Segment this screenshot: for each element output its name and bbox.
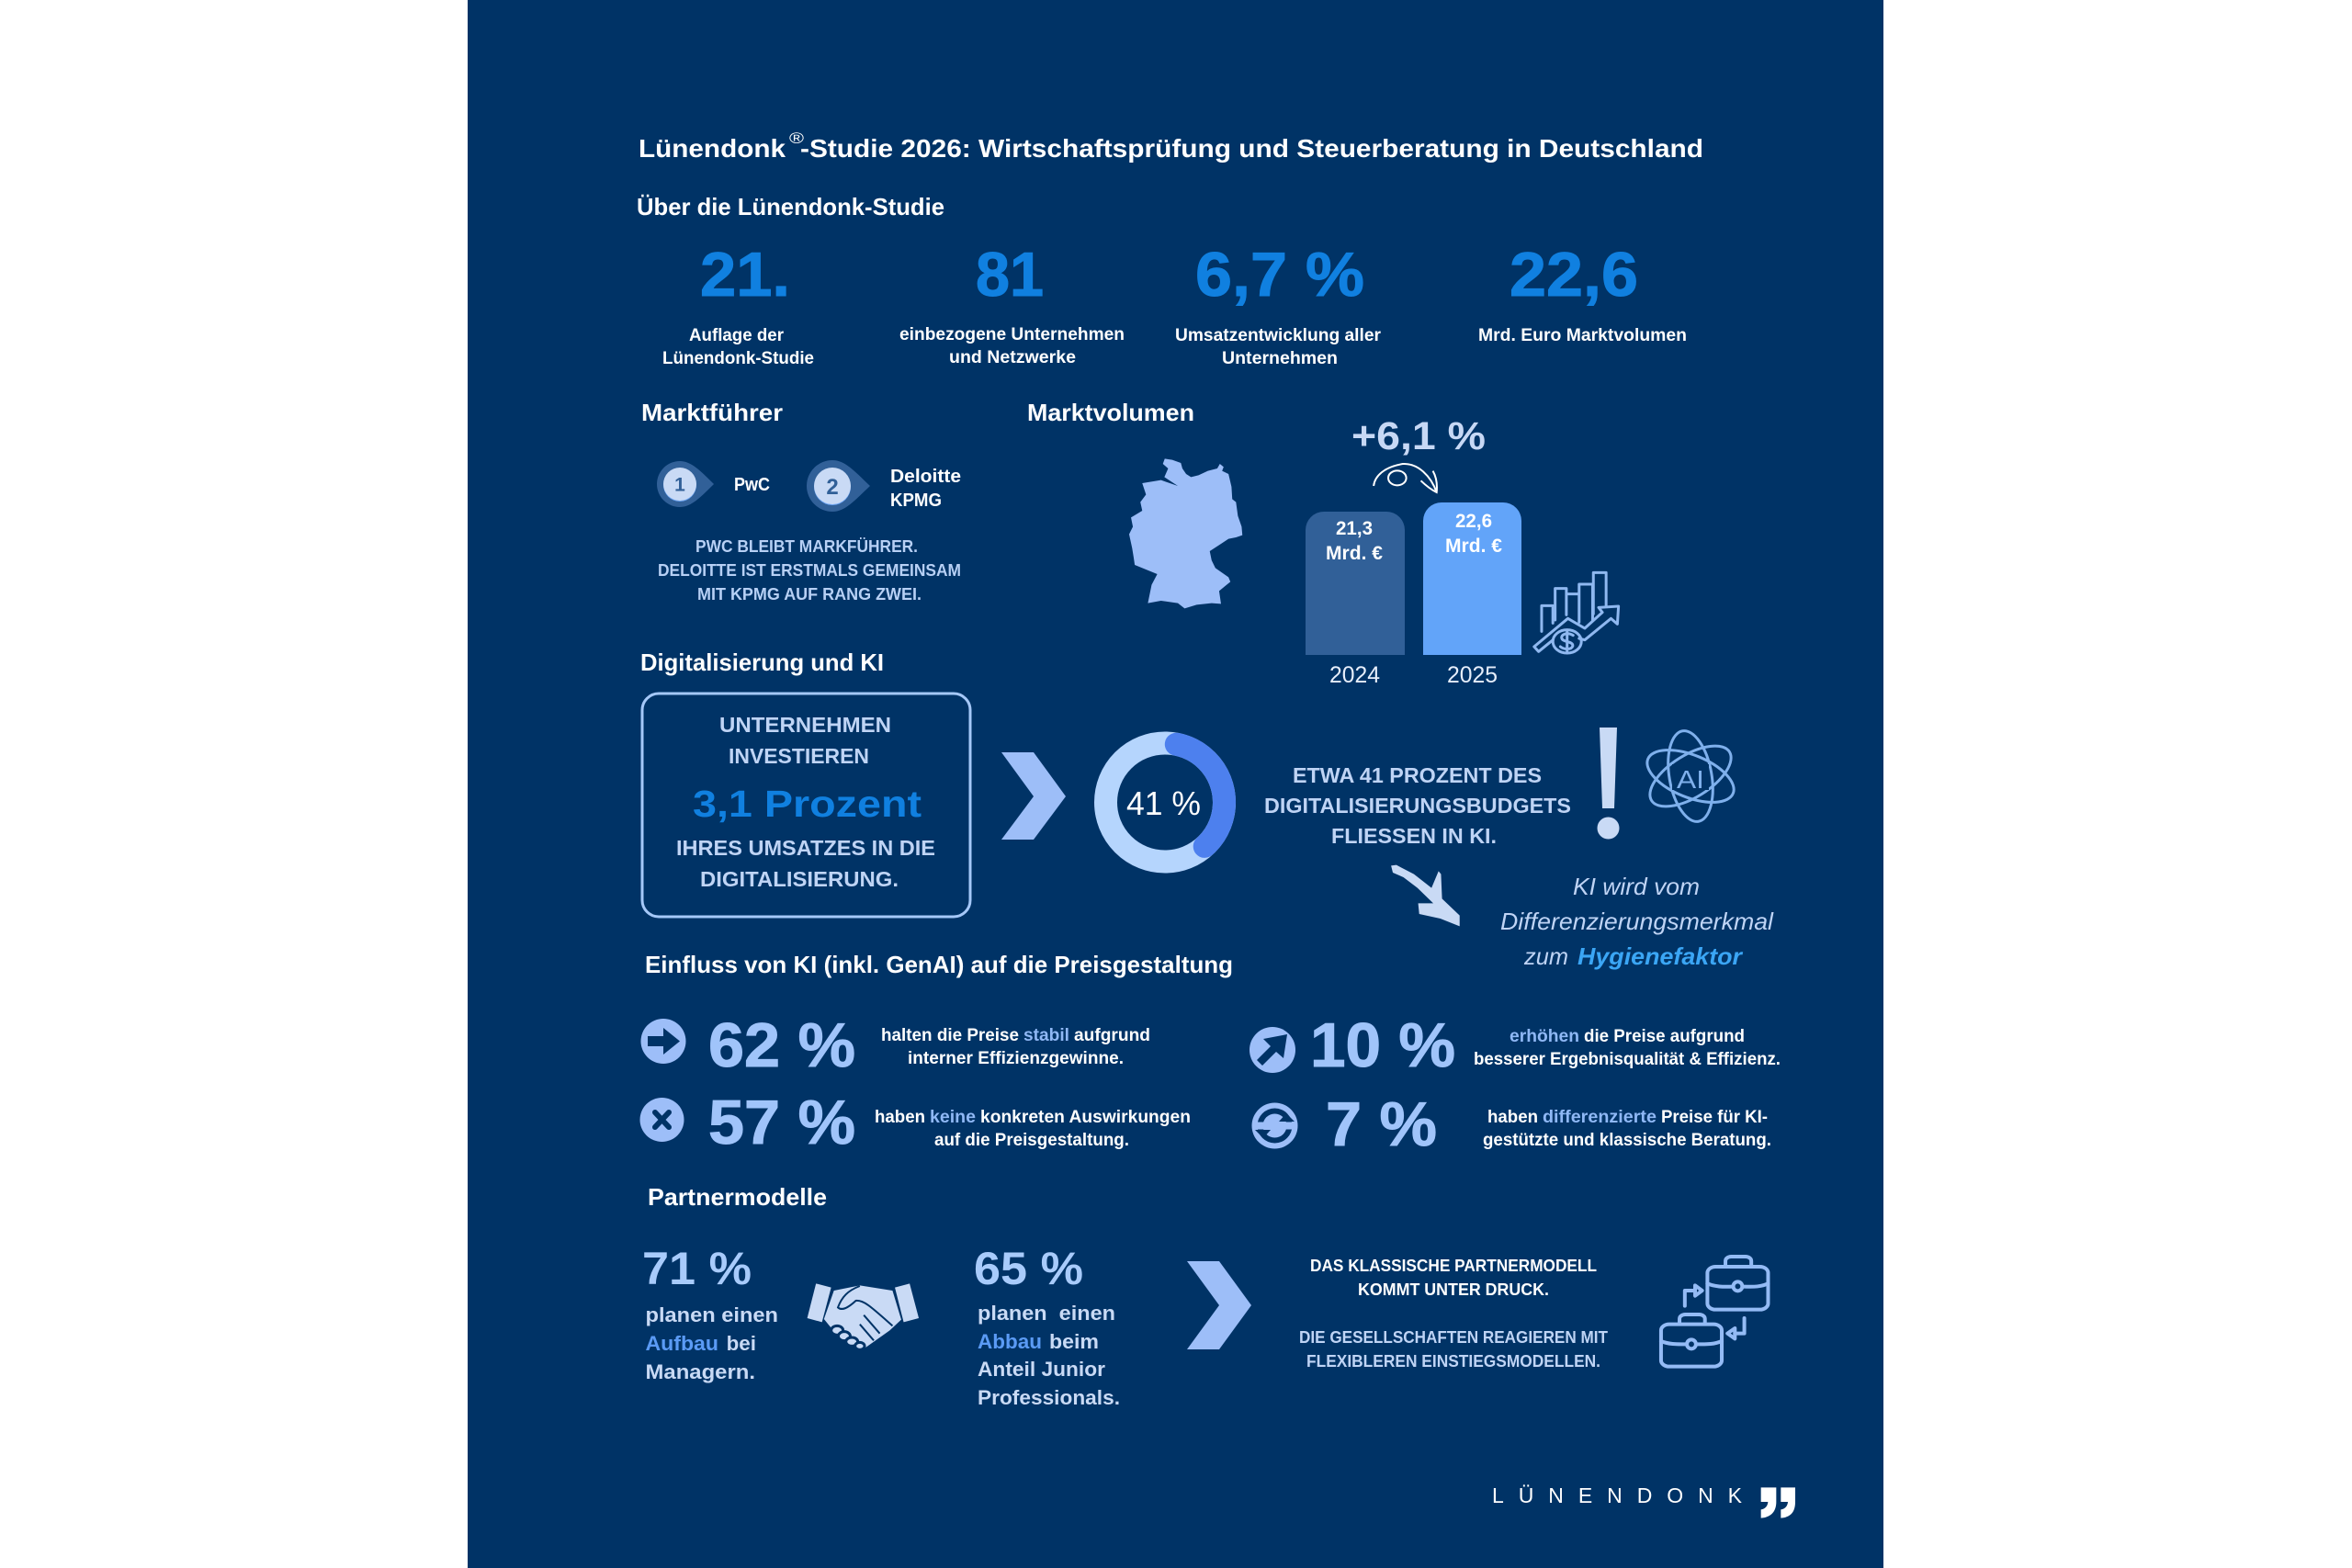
icon: arrow right circle — [641, 1019, 685, 1064]
stat: 7 percent: 7 % — [1326, 1089, 1437, 1159]
callout: investment box: INVESTIEREN — [729, 744, 869, 768]
bar: 2024 — [1306, 512, 1405, 688]
text: 10 percent description: erhöhen — [1510, 1027, 1579, 1046]
text: 65 percent description: beim — [1049, 1330, 1099, 1353]
heading: market volume: Marktvolumen — [1027, 399, 1194, 426]
text: 10 percent description: die Preise aufgrund — [1584, 1027, 1745, 1046]
stat: market volume: Mrd. Euro Marktvolumen — [1478, 326, 1687, 345]
bar: 2025 — [1423, 502, 1521, 688]
stat: edition — [662, 240, 814, 368]
stat: 62 percent: 62 % — [708, 1010, 855, 1080]
text: 57 percent description: keine — [930, 1108, 976, 1127]
stat: 10 percent: 10 % — [1310, 1010, 1455, 1080]
text: 71 percent description: Managern. — [645, 1360, 755, 1383]
stat: companies — [899, 240, 1125, 367]
text: 57 percent description: auf die Preisgestaltung. — [934, 1131, 1129, 1150]
background panel — [468, 0, 1883, 1568]
stat: 71 percent: 71 % — [642, 1243, 752, 1294]
icon: exclamation mark — [1597, 728, 1619, 840]
stat: revenue growth: 6,7 % — [1195, 240, 1364, 310]
stat: revenue growth: Umsatzentwicklung aller — [1175, 326, 1382, 345]
text: 71 percent description: bei — [727, 1332, 756, 1355]
icon: refresh circle — [1251, 1102, 1297, 1148]
arrow: pointing to statement — [1391, 865, 1460, 926]
stat: edition: Auflage der — [689, 326, 785, 345]
stat: revenue growth: Unternehmen — [1222, 349, 1338, 368]
title — [639, 130, 1703, 163]
text: 62 percent description — [881, 1026, 1150, 1068]
text: hygiene factor statement: Hygienefaktor — [1577, 942, 1744, 970]
stat: companies: und Netzwerke — [949, 348, 1076, 367]
callout: investment box — [642, 694, 970, 917]
text: AI share of budget — [1264, 763, 1571, 848]
text: 71 percent description — [645, 1303, 778, 1383]
text: leaders summary: MIT KPMG AUF RANG ZWEI. — [697, 585, 922, 604]
text: hygiene factor statement: KI wird vom — [1573, 873, 1700, 900]
text: hygiene factor statement — [1500, 873, 1774, 970]
text: 57 percent description: haben — [875, 1108, 925, 1127]
stat: revenue growth — [1175, 240, 1382, 368]
text: 10 percent description — [1474, 1027, 1781, 1069]
text: 62 percent description: aufgrund — [1074, 1026, 1150, 1045]
callout: investment box: IHRES UMSATZES IN DIE — [676, 836, 935, 860]
panel: market leaders — [641, 399, 961, 604]
text: 62 percent description: halten die Preise — [881, 1026, 1019, 1045]
title: -Studie 2026: Wirtschaftsprüfung und Steuerberatung in Deutschland — [800, 134, 1703, 163]
text: partner model conclusion: DAS KLASSISCHE PARTNERMODELL — [1310, 1257, 1597, 1275]
bar: 2024: 21,3 — [1336, 518, 1373, 539]
donut chart: 41 percent: 41 % — [1126, 784, 1201, 822]
callout: investment box: DIGITALISIERUNG. — [700, 867, 899, 891]
donut chart: 41 percent — [1106, 743, 1224, 862]
text: partner model conclusion — [1299, 1257, 1608, 1371]
bar: 2025: 2025 — [1447, 662, 1498, 688]
text: partner model conclusion: DIE GESELLSCHAFTEN REAGIEREN MIT — [1299, 1328, 1608, 1347]
arrow: chevron — [1187, 1261, 1251, 1349]
callout: investment box: UNTERNEHMEN — [719, 713, 891, 737]
stat: companies: einbezogene Unternehmen — [899, 325, 1125, 344]
icon: rank 2 badge — [807, 460, 870, 512]
stat: market volume — [1478, 240, 1687, 345]
stat: edition: 21. — [700, 240, 790, 310]
text: 7 percent description: gestützte und klassische Beratung. — [1483, 1131, 1771, 1150]
icon: handshake — [808, 1283, 919, 1349]
logo: Lünendonk — [1492, 1483, 1795, 1518]
text: hygiene factor statement: zum — [1523, 942, 1568, 970]
text: leaders summary: DELOITTE IST ERSTMALS GEMEINSAM — [658, 561, 961, 580]
heading: AI influence on pricing: Einfluss von KI (inkl. GenAI) auf die Preisgestaltung — [645, 951, 1233, 978]
stat: market volume: 22,6 — [1510, 240, 1638, 310]
text: 62 percent description: stabil — [1023, 1026, 1069, 1045]
text: partner model conclusion: KOMMT UNTER DRUCK. — [1358, 1280, 1549, 1299]
text: 65 percent description: Professionals. — [978, 1386, 1120, 1409]
label: Deloitte and KPMG: KPMG — [890, 491, 942, 511]
icon: arrow up-right circle — [1250, 1027, 1295, 1073]
bar: 2025: 22,6 — [1455, 511, 1492, 532]
label: Deloitte and KPMG — [890, 467, 961, 511]
text: leaders summary — [658, 537, 961, 604]
text: 57 percent description: konkreten Auswirkungen — [980, 1108, 1191, 1127]
text: leaders summary: PWC BLEIBT MARKFÜHRER. — [695, 537, 918, 556]
text: 7 percent description: differenzierte — [1543, 1108, 1657, 1127]
text: AI share of budget: DIGITALISIERUNGSBUDGETS — [1264, 794, 1571, 818]
panel: AI influence on pricing — [639, 951, 1781, 1159]
panel: market volume — [1027, 399, 1619, 688]
stat: edition: Lünendonk-Studie — [662, 349, 814, 368]
heading: about the study: Über die Lünendonk-Studie — [637, 193, 944, 220]
icon: cross circle — [639, 1098, 684, 1142]
stat: 57 percent: 57 % — [708, 1088, 855, 1157]
title: Lünendonk — [639, 134, 786, 163]
text: 7 percent description — [1483, 1108, 1771, 1150]
arrow: hand-drawn growth arrow — [1374, 464, 1437, 492]
icon: briefcases — [1661, 1257, 1768, 1367]
text: 65 percent description: Anteil Junior — [978, 1358, 1105, 1381]
text: partner model conclusion: FLEXIBLEREN EINSTIEGSMODELLEN. — [1306, 1352, 1600, 1371]
text: AI share of budget: FLIESSEN IN KI. — [1331, 824, 1497, 848]
icon: map of Germany — [1129, 458, 1242, 608]
text: 65 percent description: Abbau — [978, 1330, 1042, 1353]
text: 57 percent description — [875, 1108, 1191, 1150]
stat: companies: 81 — [976, 240, 1044, 310]
bar: 2024: Mrd. € — [1326, 543, 1383, 564]
callout: investment box: 3,1 Prozent — [693, 783, 922, 825]
bar: 2025: Mrd. € — [1445, 536, 1502, 557]
text: 7 percent description: haben — [1487, 1108, 1538, 1127]
text: 10 percent description: besserer Ergebnisqualität & Effizienz. — [1474, 1050, 1781, 1069]
text: 71 percent description: Aufbau — [645, 1332, 718, 1355]
heading: partner models: Partnermodelle — [648, 1183, 827, 1211]
title: ® — [789, 130, 805, 147]
arrow: chevron — [1001, 752, 1066, 840]
text: hygiene factor statement: Differenzierungsmerkmal — [1500, 908, 1774, 935]
heading: digitalisation and AI: Digitalisierung und KI — [640, 649, 884, 676]
text: 65 percent description: planen einen — [978, 1302, 1115, 1325]
stat: 65 percent: 65 % — [974, 1243, 1083, 1294]
growth figure: +6,1 % — [1351, 414, 1486, 458]
label: Deloitte and KPMG: Deloitte — [890, 467, 961, 487]
icon: chart with dollar — [1534, 572, 1619, 653]
icon: rank 1 badge: 1 — [674, 474, 685, 496]
text: AI share of budget: ETWA 41 PROZENT DES — [1293, 763, 1542, 787]
panel: partner models — [642, 1183, 1768, 1409]
heading: market leaders: Marktführer — [641, 399, 783, 426]
text: 65 percent description — [978, 1302, 1120, 1409]
bar: 2024: 2024 — [1329, 662, 1380, 688]
text: 71 percent description: planen einen — [645, 1303, 778, 1326]
icon: rank 2 badge: 2 — [826, 475, 839, 500]
text: 7 percent description: Preise für KI- — [1661, 1108, 1768, 1127]
panel: about the study — [637, 193, 1687, 368]
label: PwC: PwC — [734, 475, 770, 495]
logo: Lünendonk: LÜNENDONK — [1492, 1483, 1743, 1507]
icon: AI atom — [1640, 728, 1741, 825]
panel: digitalisation and AI — [640, 649, 1774, 970]
text: 62 percent description: interner Effizienzgewinne. — [908, 1049, 1124, 1068]
icon: AI atom: AI — [1677, 765, 1704, 794]
icon: rank 1 badge — [657, 461, 714, 507]
